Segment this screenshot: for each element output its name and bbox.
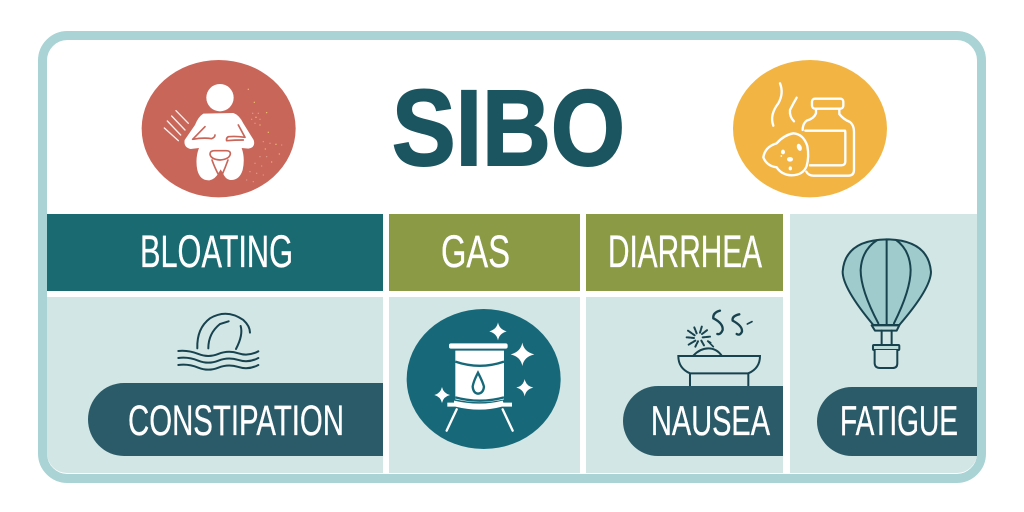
panel: gas cell <box>389 297 580 473</box>
panel: gas header <box>389 214 580 291</box>
panel: symptom grid <box>47 214 977 473</box>
label pill: constipation: CONSTIPATION <box>128 397 344 445</box>
panel: fatigue cell <box>790 214 977 473</box>
outer frame <box>42 36 982 478</box>
panel: bloating header <box>47 214 383 291</box>
label pill: nausea <box>623 386 783 456</box>
panel: nausea cell <box>586 297 783 473</box>
icon: jar and stool in yellow circle <box>733 60 887 197</box>
label pill: fatigue: FATIGUE <box>840 397 958 444</box>
panel: constipation cell <box>47 297 383 473</box>
label pill: fatigue <box>817 387 977 456</box>
label: gas: GAS <box>441 226 510 277</box>
title: SIBO <box>392 67 625 188</box>
icon: bloated person in red circle <box>142 60 296 197</box>
label pill: constipation <box>88 383 383 456</box>
panel: diarrhea header <box>586 214 783 291</box>
panel: white card background <box>47 40 977 473</box>
icon: hot air balloon <box>843 239 931 368</box>
icon: nausea bowl with burst and fumes <box>678 311 760 386</box>
label: bloating: BLOATING <box>140 226 293 277</box>
icon: water barrel in teal circle <box>407 309 561 449</box>
label: diarrhea: DIARRHEA <box>608 226 762 277</box>
icon: ring over waves <box>178 314 258 370</box>
label pill: nausea: NAUSEA <box>651 397 770 444</box>
